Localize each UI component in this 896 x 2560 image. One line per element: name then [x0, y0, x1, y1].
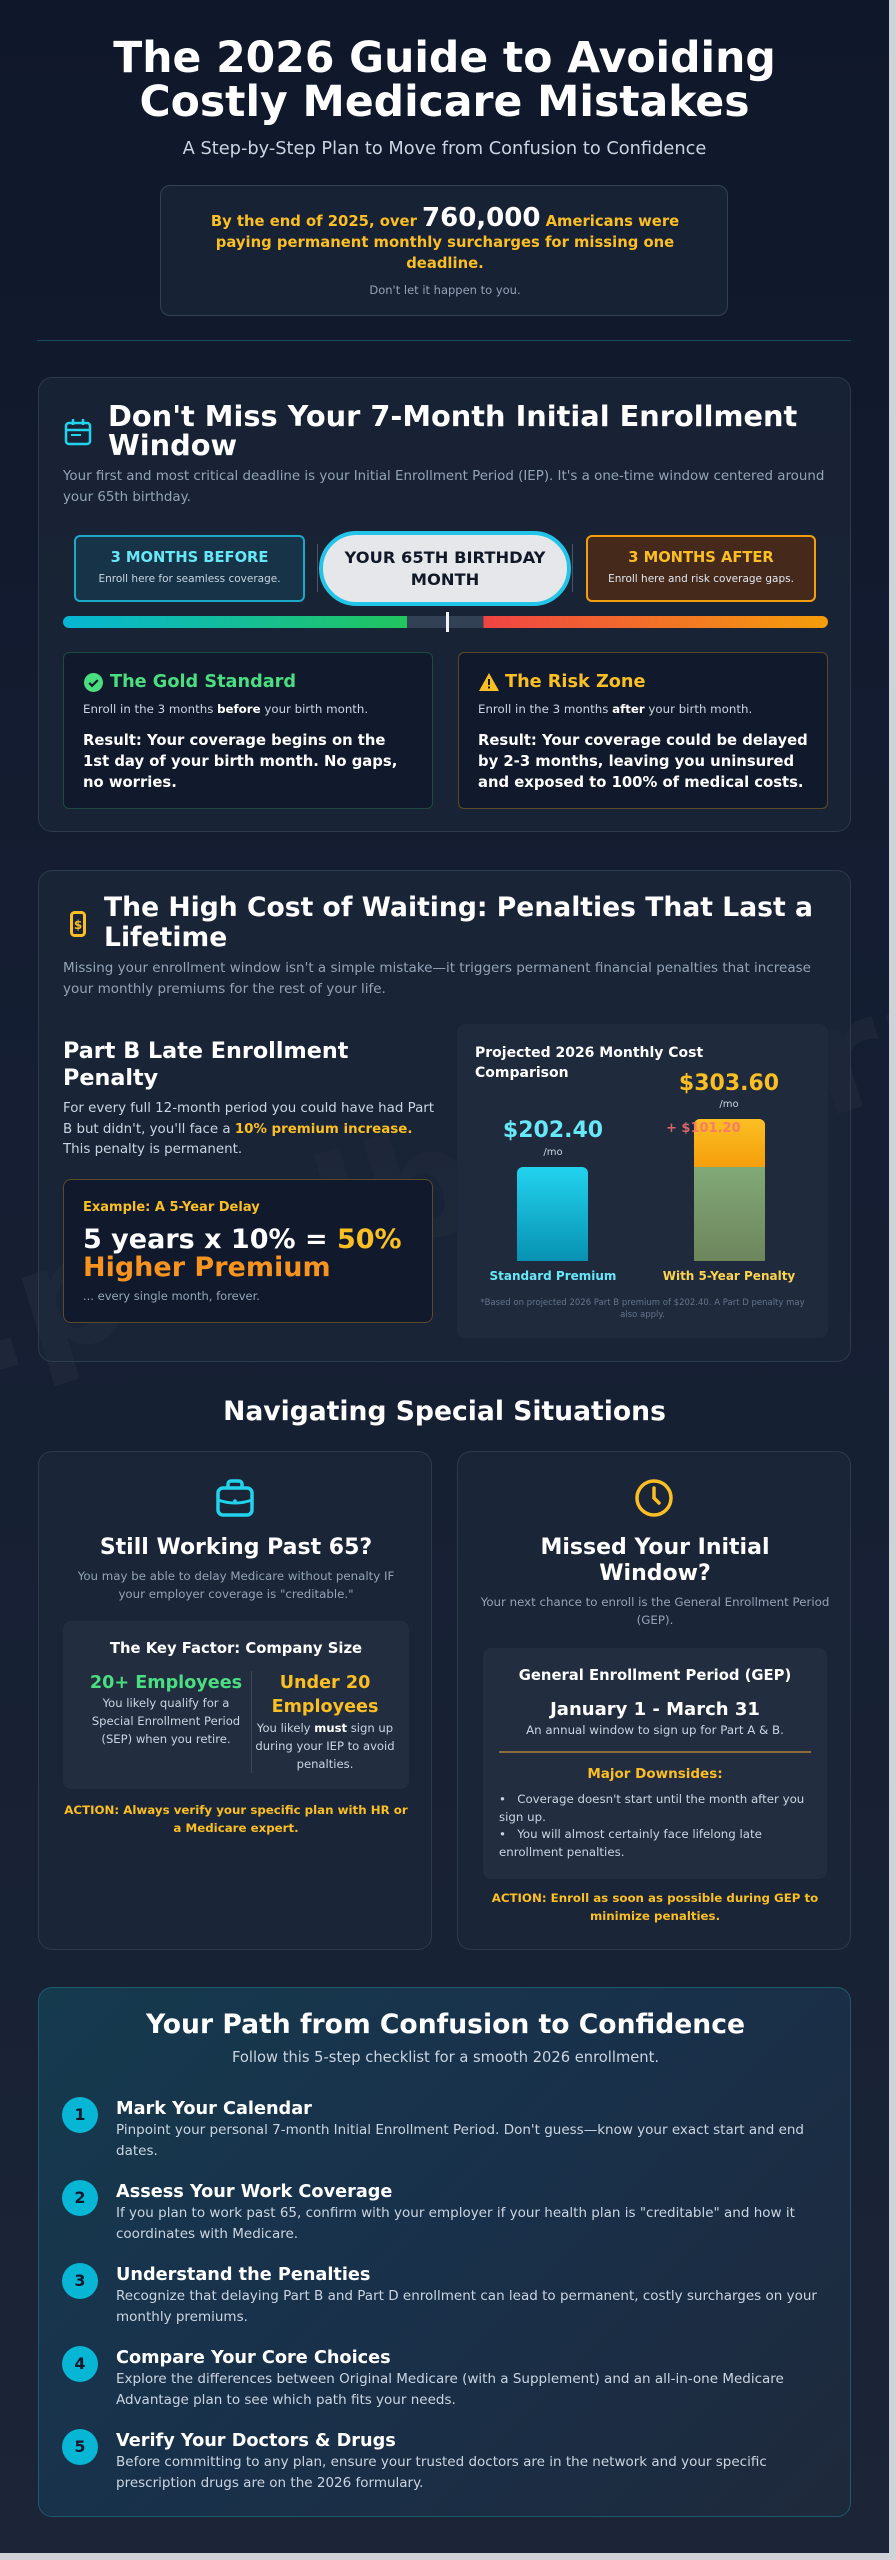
box: 3 months after: 3 MONTHS AFTER [628, 549, 774, 566]
heading: Don't Miss Your 7-Month Initial Enrollment Window [108, 399, 797, 462]
example box [63, 1179, 433, 1323]
value: 202.40: $202.40 [503, 1118, 603, 1143]
subtitle: Follow this 5-step checklist for a smooth 2026 enrollment. [232, 2049, 659, 2066]
step 3: monthly premiums. [116, 2309, 248, 2325]
step 5: 5 [74, 2437, 86, 2456]
downsides list [499, 1792, 804, 1859]
stat callout [160, 185, 728, 316]
step 4: Advantage plan to see which path fits your needs. [116, 2392, 456, 2408]
card: risk zone [458, 652, 828, 809]
heading: special situations: Navigating Special Situations [223, 1396, 666, 1427]
step 3 [62, 2263, 817, 2325]
downsides list: • You will almost certainly face lifelong late enrollment penalties. [499, 1827, 762, 1859]
step 2: If you plan to work past 65, confirm with your employer if your health plan is "creditable" and how it [116, 2205, 795, 2221]
step 2: Assess Your Work Coverage [116, 2182, 392, 2202]
card: gold standard: The Gold Standard [110, 672, 296, 692]
chart: cost comparison: + $101.20 [666, 1121, 741, 1136]
title: Still Working Past 65? [100, 1535, 372, 1560]
step 4 [62, 2346, 784, 2408]
pill: 65th birthday month: MONTH [411, 570, 479, 589]
card: risk zone: Result: Your coverage could be delayed by 2-3 months, leaving you uninsured and exposed to 100% of medical costs. [478, 732, 808, 791]
step 2 [62, 2180, 795, 2242]
icon: money: $ [74, 918, 82, 932]
step 5: prescription drugs are on the 2026 formulary. [116, 2475, 423, 2491]
column: under 20 [255, 1673, 395, 1771]
step 4: 4 [74, 2354, 86, 2373]
step 3: 3 [74, 2271, 86, 2290]
Part B heading: Part B Late Enrollment Penalty [63, 1038, 348, 1091]
icon: warning [479, 673, 499, 691]
box: 3 months before: 3 MONTHS BEFORE [111, 549, 268, 566]
panel: high cost of waiting [38, 870, 851, 1362]
title: Costly Medicare Mistakes [139, 78, 750, 127]
title: Missed Your Initial Window? [540, 1535, 769, 1586]
card: gold standard [63, 652, 433, 809]
box: 3 months after: Enroll here and risk coverage gaps. [608, 573, 794, 585]
card: gold standard: Result: Your coverage begins on the 1st day of your birth month. No gaps, no worries. [83, 732, 397, 791]
stat text: By the end of 2025, over 760,000 Americans were paying permanent monthly surcharges for missing one deadline. [211, 203, 679, 272]
key factor box [63, 1621, 409, 1789]
step 3: Understand the Penalties [116, 2265, 370, 2285]
timeline bar [63, 616, 828, 628]
bar: standard [517, 1167, 588, 1261]
description: Your next chance to enroll is the General Enrollment Period (GEP). [481, 1595, 829, 1627]
panel: path checklist [38, 1987, 851, 2517]
value: 303.60: $303.60 [679, 1071, 779, 1096]
example box: 5 years x 10% = 50% Higher Premium [83, 1224, 402, 1283]
box: 3 months after [586, 535, 816, 602]
GEP box: January 1 - March 31 [550, 1699, 760, 1720]
icon: briefcase [216, 1479, 254, 1517]
intro text: Missing your enrollment window isn't a simple mistake—it triggers permanent financial penalties that increase your monthly premiums for the rest of your life. [63, 960, 811, 997]
step 1: Mark Your Calendar [116, 2099, 312, 2119]
chart: cost comparison [457, 1024, 828, 1338]
chart: cost comparison: /mo [719, 1099, 739, 1110]
step 1: Pinpoint your personal 7-month Initial Enrollment Period. Don't guess—know your exact start and end [116, 2122, 804, 2138]
example box: Example: A 5-Year Delay [83, 1200, 260, 1215]
panel: missed window [457, 1451, 851, 1950]
card: risk zone: Enroll in the 3 months after your birth month. [478, 702, 752, 716]
box: 3 months before: Enroll here for seamless coverage. [98, 573, 281, 585]
title: Your Path from Confusion to Confidence [146, 2009, 745, 2040]
GEP box: Major Downsides: [587, 1766, 723, 1782]
icon: check [84, 673, 103, 692]
Part B text: For every full 12-month period you could have had Part B but didn't, you'll face a 10% premium increase. This penalty is permanent. [63, 1101, 434, 1157]
column: 20+ employees: 20+ Employees [90, 1673, 242, 1693]
pill: 65th birthday month [319, 531, 571, 606]
example box: ... every single month, forever. [83, 1289, 260, 1303]
step 5: Verify Your Doctors & Drugs [116, 2431, 396, 2451]
box: 3 months before [74, 535, 305, 602]
GEP box: An annual window to sign up for Part A & B. [526, 1723, 784, 1737]
step 2: 2 [74, 2188, 86, 2207]
chart: cost comparison: Projected 2026 Monthly Cost Comparison [475, 1045, 703, 1081]
column: under 20: Under 20 Employees [272, 1673, 378, 1717]
step 1: dates. [116, 2143, 158, 2159]
icon: clock [635, 1479, 673, 1517]
stat subline: Don't let it happen to you. [369, 283, 521, 297]
column: under 20: You likely must sign up during your IEP to avoid penalties. [255, 1721, 395, 1771]
card: gold standard: Enroll in the 3 months before your birth month. [83, 702, 368, 716]
step 4: Compare Your Core Choices [116, 2348, 391, 2368]
panel: initial enrollment window [38, 377, 851, 832]
column: 20+ employees: You likely qualify for a Special Enrollment Period (SEP) when you retire. [92, 1696, 240, 1746]
description: You may be able to delay Medicare without penalty IF your employer coverage is "creditable." [78, 1569, 394, 1601]
step 2: coordinates with Medicare. [116, 2226, 298, 2242]
title: The 2026 Guide to Avoiding [113, 34, 776, 83]
panel: still working [38, 1451, 432, 1950]
step 1 [62, 2097, 804, 2159]
column: 20+ employees [90, 1673, 242, 1746]
bar: penalty [694, 1119, 765, 1261]
step 1: 1 [74, 2105, 86, 2124]
step 4: Explore the differences between Original Medicare (with a Supplement) and an all-in-one Medicare [116, 2371, 784, 2387]
pill: 65th birthday month: YOUR 65TH BIRTHDAY [345, 548, 545, 567]
action note: ACTION: Always verify your specific plan with HR or a Medicare expert. [64, 1803, 408, 1835]
action note: ACTION: Enroll as soon as possible during GEP to minimize penalties. [492, 1891, 818, 1923]
icon: money [70, 911, 86, 937]
subtitle: A Step-by-Step Plan to Move from Confusion to Confidence [183, 138, 706, 159]
step 5: Before committing to any plan, ensure your trusted doctors are in the network and your specific [116, 2454, 767, 2470]
downsides list: • Coverage doesn't start until the month after you sign up. [499, 1792, 804, 1824]
key factor box: The Key Factor: Company Size [110, 1640, 362, 1657]
title [113, 34, 776, 127]
step 5 [62, 2429, 767, 2491]
icon: calendar [64, 419, 92, 446]
GEP box [483, 1648, 827, 1879]
intro text: Your first and most critical deadline is your Initial Enrollment Period (IEP). It's a one-time window centered around your 65th birthday. [63, 469, 824, 505]
step 3: Recognize that delaying Part B and Part D enrollment can lead to permanent, costly surcharges on your [116, 2288, 817, 2304]
GEP box: General Enrollment Period (GEP) [519, 1667, 791, 1684]
heading: The High Cost of Waiting: Penalties That Last a Lifetime [104, 892, 813, 953]
chart: cost comparison: *Based on projected 2026 Part B premium of $202.40. A Part D penalty may also apply. [480, 1298, 805, 1320]
card: risk zone: The Risk Zone [505, 672, 646, 692]
chart: cost comparison: With 5-Year Penalty [663, 1269, 795, 1283]
chart: cost comparison: /mo [543, 1147, 563, 1158]
labels: Standard Premium [490, 1269, 616, 1283]
